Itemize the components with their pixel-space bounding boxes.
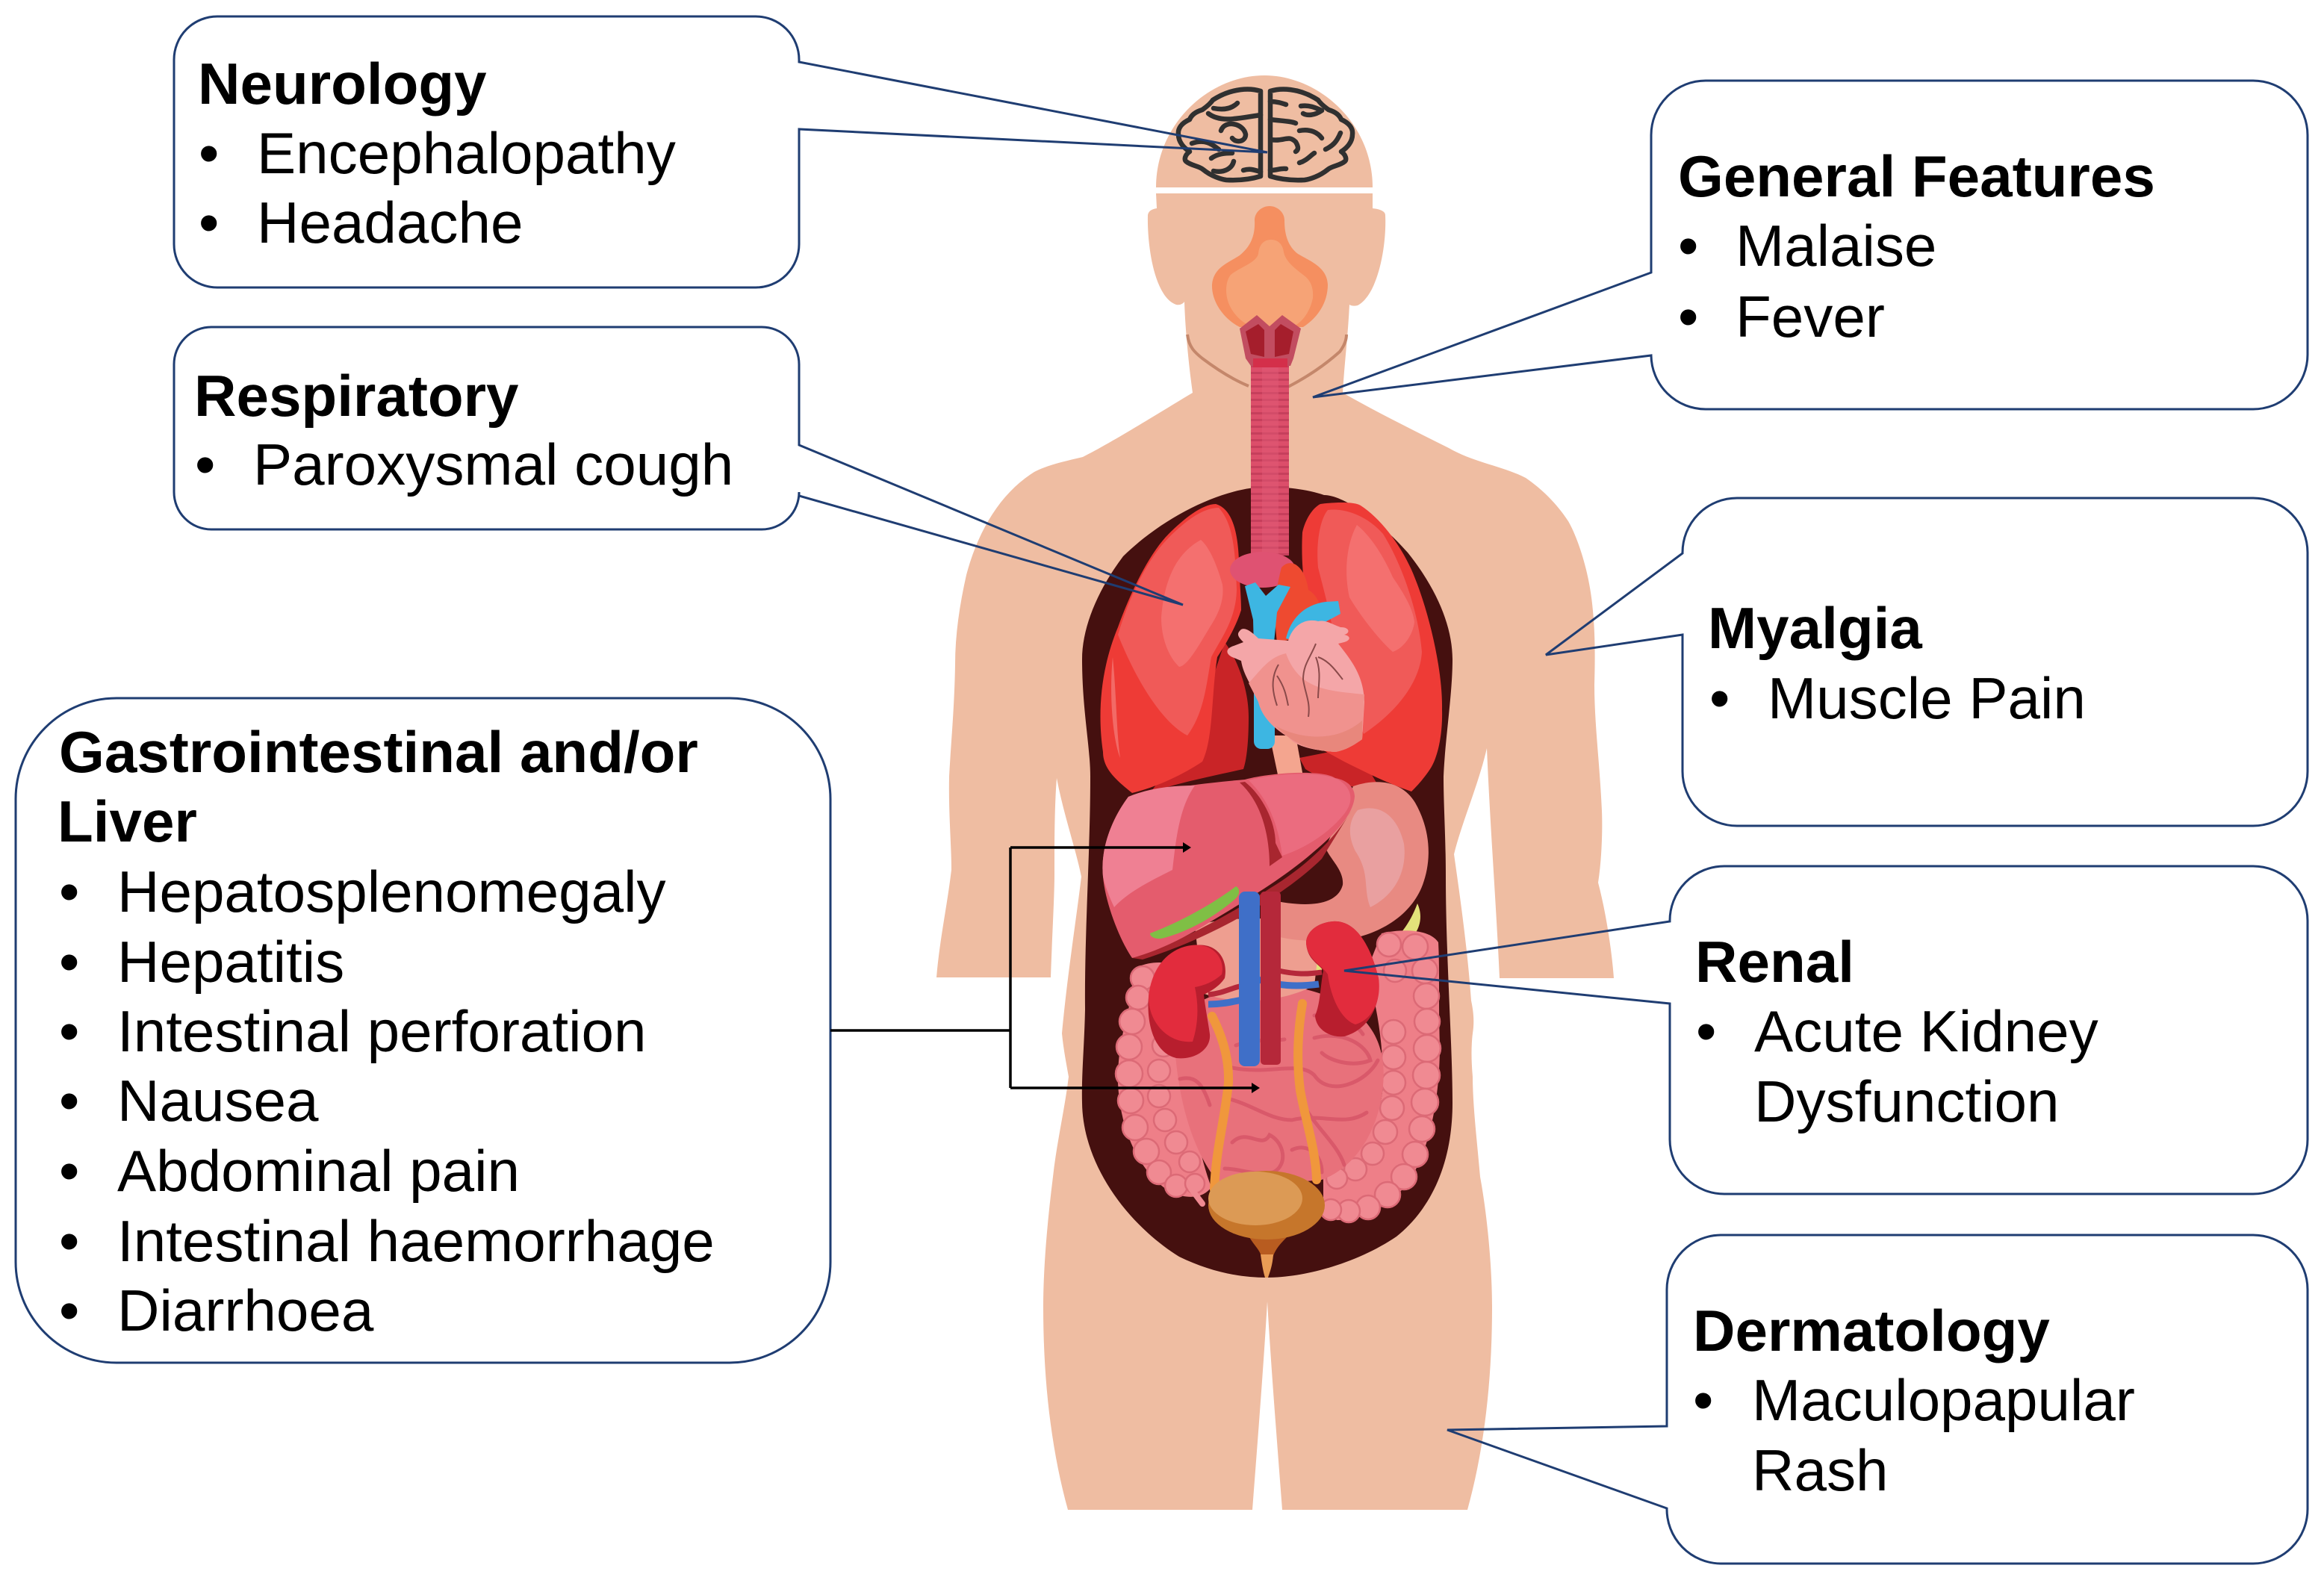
ureters	[1212, 1004, 1317, 1189]
callout: neurology outline	[174, 16, 1267, 287]
list: neurology symptoms: •	[199, 120, 219, 186]
larynx	[1240, 315, 1301, 367]
list: neurology symptoms: Encephalopathy	[257, 120, 676, 186]
panel: myalgia	[1546, 498, 2308, 826]
body silhouette	[936, 193, 1614, 1510]
panel: gastrointestinal and liver	[16, 698, 830, 1363]
heading: renal: Renal	[1695, 929, 1854, 995]
top of head	[1156, 75, 1373, 187]
callout: renal outline	[1344, 866, 2308, 1194]
pulmonary vessels	[1286, 601, 1340, 642]
right lung	[1299, 503, 1442, 791]
superior vena cava	[1245, 582, 1290, 676]
small intestine	[1174, 918, 1384, 1189]
panel: dermatology	[1447, 1235, 2308, 1564]
list: gastrointestinal symptoms: •	[59, 1138, 79, 1204]
list: general symptoms: •	[1678, 213, 1698, 279]
list: gastrointestinal symptoms: Intestinal perforation	[117, 998, 646, 1064]
box: gastrointestinal outline	[16, 698, 830, 1363]
list: renal symptoms: Acute Kidney	[1754, 998, 2098, 1064]
panel: general features	[1313, 81, 2308, 409]
list: gastrointestinal symptoms: Abdominal pain	[117, 1138, 520, 1204]
callout: dermatology outline	[1447, 1235, 2308, 1564]
bronchi junction	[1230, 552, 1296, 588]
list: gastrointestinal symptoms: •	[59, 929, 79, 995]
aortic arch	[1276, 563, 1321, 642]
heading: dermatology: Dermatology	[1693, 1298, 2050, 1363]
list: gastrointestinal symptoms	[59, 859, 715, 1343]
oral cavity	[1226, 240, 1313, 327]
heading: gastrointestinal and/or liver	[58, 719, 698, 854]
list: gastrointestinal symptoms: •	[59, 998, 79, 1064]
right kidney	[1306, 921, 1379, 1036]
list: gastrointestinal symptoms: Hepatitis	[117, 929, 344, 995]
list: neurology symptoms	[199, 120, 676, 255]
list: myalgia symptoms: Muscle Pain	[1768, 665, 2086, 731]
list: dermatology symptoms: Maculopapular	[1752, 1367, 2135, 1433]
liver	[1102, 773, 1355, 959]
inferior vena cava	[1239, 892, 1260, 1066]
stomach	[1270, 782, 1429, 941]
gall bladder	[1150, 886, 1239, 939]
pancreas	[1226, 903, 1420, 974]
heart	[1227, 621, 1364, 752]
list: renal symptoms	[1696, 998, 2098, 1134]
heading: gastrointestinal and/or liver: Gastrointestinal and/or	[59, 719, 698, 785]
list: gastrointestinal symptoms: Hepatosplenomegaly	[117, 859, 666, 924]
callout: general features outline	[1313, 81, 2308, 409]
heading: myalgia: Myalgia	[1708, 595, 1922, 661]
list: gastrointestinal symptoms: •	[59, 1278, 79, 1343]
panel: respiratory	[174, 327, 1183, 605]
panel: renal	[1344, 866, 2308, 1194]
list: neurology symptoms: Headache	[257, 190, 523, 255]
heading: neurology: Neurology	[198, 51, 487, 116]
callout: respiratory outline	[174, 327, 1183, 605]
icon: brain	[1178, 90, 1352, 180]
list: gastrointestinal symptoms: •	[59, 859, 79, 924]
list: neurology symptoms: •	[199, 190, 219, 255]
large intestine	[1116, 930, 1441, 1222]
human body figure	[936, 75, 1614, 1510]
nasal cavity	[1212, 206, 1328, 327]
list: dermatology symptoms: Rash	[1752, 1437, 1889, 1503]
list: renal symptoms: Dysfunction	[1754, 1069, 2060, 1134]
body cavity	[1082, 487, 1452, 1278]
renal veins	[1208, 980, 1319, 1004]
list: myalgia symptoms: •	[1709, 665, 1730, 731]
renal arteries	[1208, 971, 1322, 995]
list: general symptoms	[1678, 213, 1936, 349]
list: dermatology symptoms: •	[1693, 1367, 1713, 1433]
left lung	[1101, 504, 1249, 793]
callout: myalgia outline	[1546, 498, 2308, 826]
list: general symptoms: •	[1678, 284, 1698, 349]
list: gastrointestinal symptoms: •	[59, 1068, 79, 1133]
list: gastrointestinal symptoms: Nausea	[117, 1068, 319, 1133]
list: gastrointestinal symptoms: Diarrhoea	[117, 1278, 374, 1343]
list: general symptoms: Malaise	[1736, 213, 1936, 279]
bladder	[1208, 1171, 1325, 1278]
lower vena cava	[1254, 672, 1275, 749]
oesophagus	[1270, 735, 1303, 778]
list: respiratory symptoms: Paroxysmal cough	[253, 432, 733, 497]
list: gastrointestinal symptoms: •	[59, 1208, 79, 1274]
heading: general features: General Features	[1678, 143, 2155, 209]
panel: neurology	[174, 16, 1267, 287]
jaw line	[1187, 335, 1346, 387]
heading: respiratory: Respiratory	[194, 363, 519, 429]
abdominal aorta	[1261, 892, 1281, 1065]
left kidney	[1148, 945, 1225, 1058]
list: renal symptoms: •	[1696, 998, 1716, 1064]
heading: gastrointestinal and/or liver: Liver	[58, 789, 197, 854]
list: general symptoms: Fever	[1736, 284, 1885, 349]
list: respiratory symptoms: •	[195, 432, 215, 497]
trachea	[1251, 365, 1289, 556]
list: gastrointestinal symptoms: Intestinal haemorrhage	[117, 1208, 715, 1274]
list: dermatology symptoms	[1693, 1367, 2135, 1503]
arrow: gastrointestinal connector to liver and intestine	[830, 842, 1260, 1093]
